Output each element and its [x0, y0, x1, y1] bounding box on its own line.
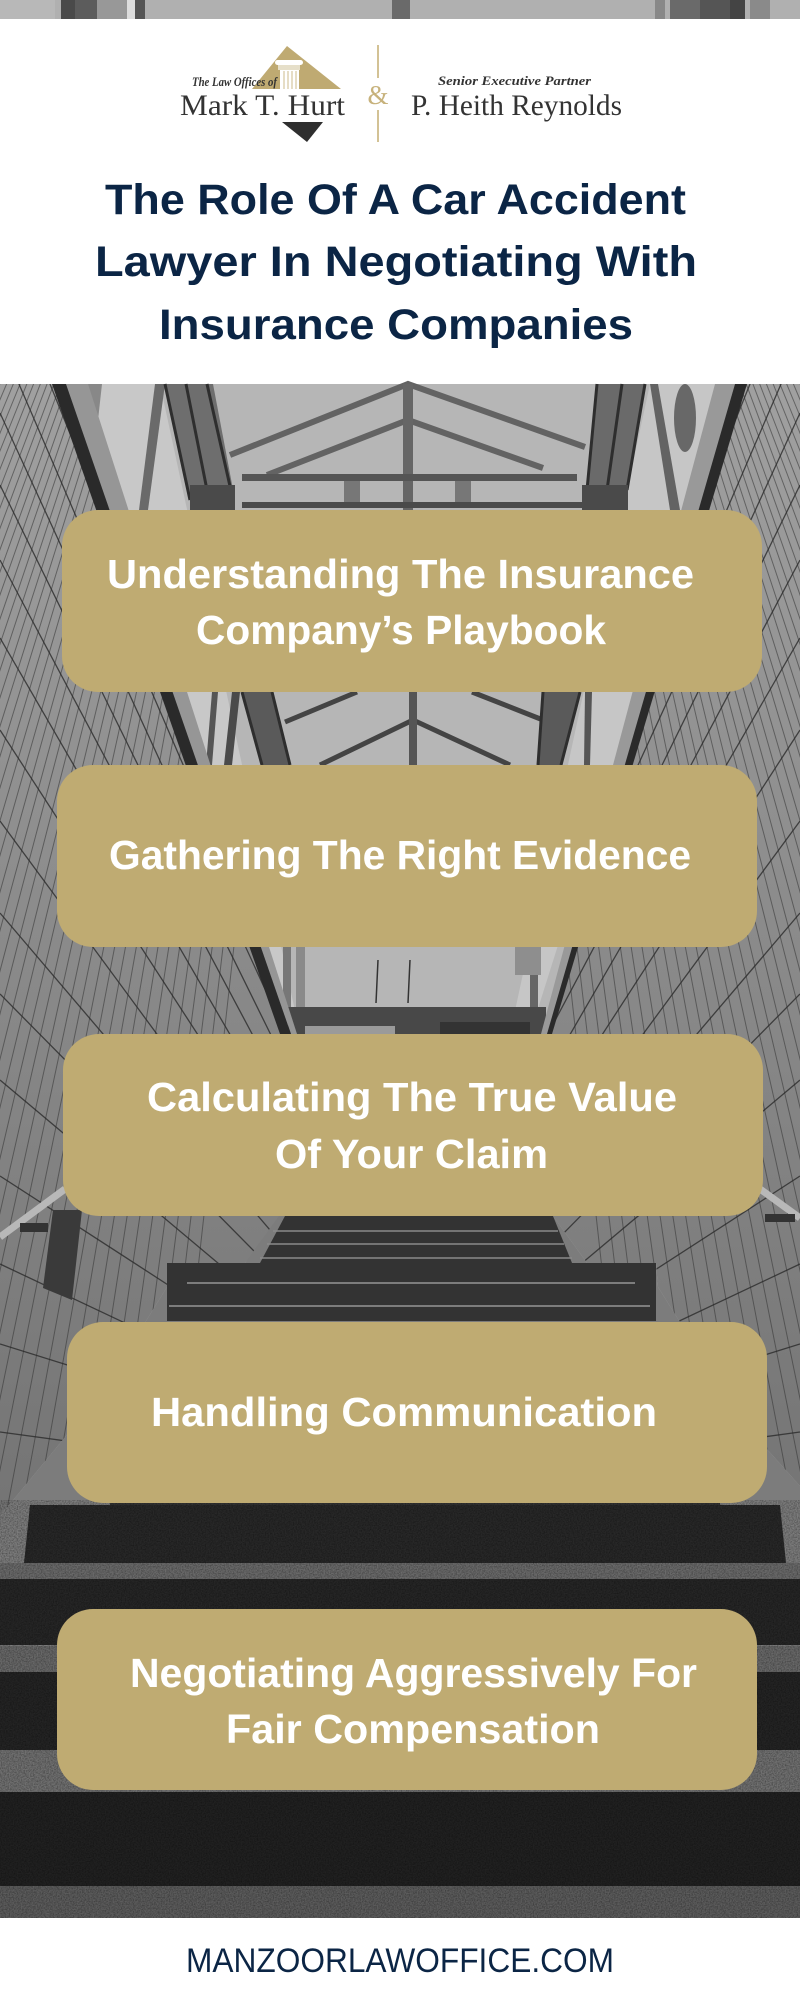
photo sky: [0, 384, 800, 1918]
photo right tiled wall: [552, 384, 800, 1486]
photo left tiled wall: [0, 384, 280, 1516]
card 3: [63, 1034, 763, 1216]
card 3: Calculating The True Value: [147, 1074, 677, 1120]
photo texture: [0, 1500, 800, 1918]
photo stairs: [0, 1216, 800, 1918]
card 1: [62, 510, 762, 692]
title: Insurance Companies: [159, 301, 633, 349]
logo text: senior executive partner: Senior Executive Partner: [438, 73, 592, 88]
background photo: stairwell: [0, 380, 800, 1918]
card 3: Of Your Claim: [275, 1131, 548, 1177]
logo text: P. Heith Reynolds: P. Heith Reynolds: [411, 89, 622, 122]
logo text: the law offices of: The Law Offices of: [192, 74, 278, 89]
footer website: MANZOORLAWOFFICE.COM: [186, 1942, 614, 1980]
card 2: Gathering The Right Evidence: [109, 832, 691, 878]
card 5: [57, 1609, 757, 1790]
photo stairway exit frame: [283, 947, 546, 1034]
card 1: Understanding The Insurance: [107, 551, 694, 597]
title: The Role Of A Car Accident: [105, 176, 686, 224]
title: Lawyer In Negotiating With: [95, 238, 697, 286]
logo: [180, 45, 622, 142]
title: [95, 176, 697, 349]
card 5: Fair Compensation: [226, 1706, 600, 1752]
photo roof truss upper: [88, 384, 696, 510]
logo icon: gold pediment with column: [252, 46, 341, 89]
logo divider with ampersand: &: [367, 80, 389, 110]
logo text: Mark T. Hurt: Mark T. Hurt: [180, 89, 346, 122]
card 2: [57, 765, 757, 947]
photo roof truss middle: [206, 692, 592, 765]
footer white panel: [0, 1918, 800, 2000]
top photo strip: [0, 0, 800, 19]
card 1: Company’s Playbook: [196, 607, 606, 653]
card 4: [67, 1322, 767, 1503]
photo left wall edge beam: [52, 384, 297, 1034]
card 5: Negotiating Aggressively For: [130, 1650, 697, 1696]
photo handrails: [0, 1189, 800, 1300]
card 4: Handling Communication: [151, 1389, 657, 1435]
header white panel: [0, 19, 800, 384]
photo right wall edge beam: [541, 384, 747, 1034]
logo icon: dark triangle: [282, 122, 323, 142]
logo divider with ampersand: [367, 45, 389, 142]
